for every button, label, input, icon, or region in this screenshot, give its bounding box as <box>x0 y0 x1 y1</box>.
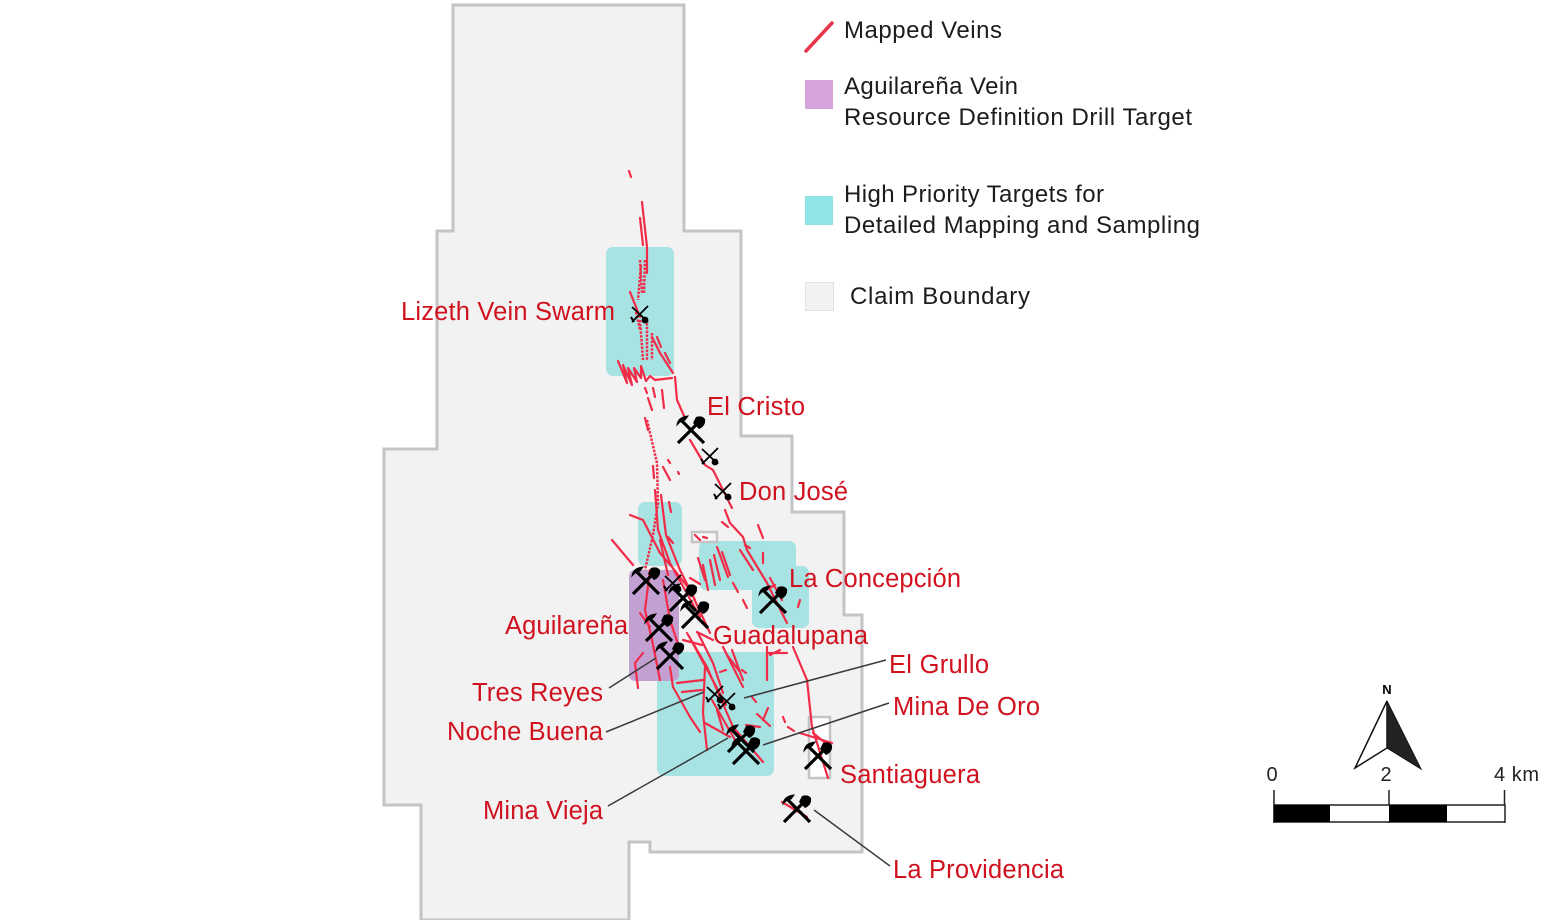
site labels: Noche Buena <box>447 718 604 746</box>
site labels: La Concepción <box>789 565 961 593</box>
mine icons <box>631 306 832 822</box>
site labels: El Grullo <box>889 651 989 679</box>
legend: drill target: Resource Definition Drill Target <box>844 104 1192 131</box>
site labels: El Cristo <box>707 393 805 421</box>
legend: high priority targets: Detailed Mapping and Sampling <box>844 212 1200 239</box>
legend: mapped veins <box>806 17 1002 51</box>
Aguilareña drill target <box>629 570 679 681</box>
claim inliers <box>692 532 830 778</box>
site labels: Tres Reyes <box>472 679 603 707</box>
mapped veins <box>612 171 832 817</box>
claim boundary <box>384 5 862 920</box>
site labels: Guadalupana <box>713 622 869 650</box>
legend <box>805 17 1200 310</box>
site labels: Mina Vieja <box>483 797 604 825</box>
scale bar: 0 <box>1266 764 1278 786</box>
high priority target zones <box>606 247 809 776</box>
site labels: Mina De Oro <box>893 693 1040 721</box>
legend: high priority targets: High Priority Targets for <box>844 181 1104 208</box>
site labels: Lizeth Vein Swarm <box>401 298 615 326</box>
north arrow: N <box>1382 682 1392 697</box>
site labels: Don José <box>739 478 848 506</box>
scale bar: 4 km <box>1494 764 1539 786</box>
north arrow <box>1355 682 1421 769</box>
site labels: Aguilareña <box>505 612 629 640</box>
legend: claim boundary: Claim Boundary <box>850 283 1030 310</box>
site labels: La Providencia <box>893 856 1065 884</box>
legend: drill target: Aguilareña Vein <box>844 73 1018 100</box>
scale bar: 2 <box>1380 764 1392 786</box>
legend: drill target <box>805 73 1192 131</box>
scale bar <box>1266 764 1539 823</box>
leader lines <box>606 658 890 866</box>
site labels <box>401 298 1065 884</box>
site labels: Santiaguera <box>840 761 981 789</box>
legend: high priority targets <box>805 181 1200 239</box>
legend: mapped veins: Mapped Veins <box>844 17 1002 44</box>
